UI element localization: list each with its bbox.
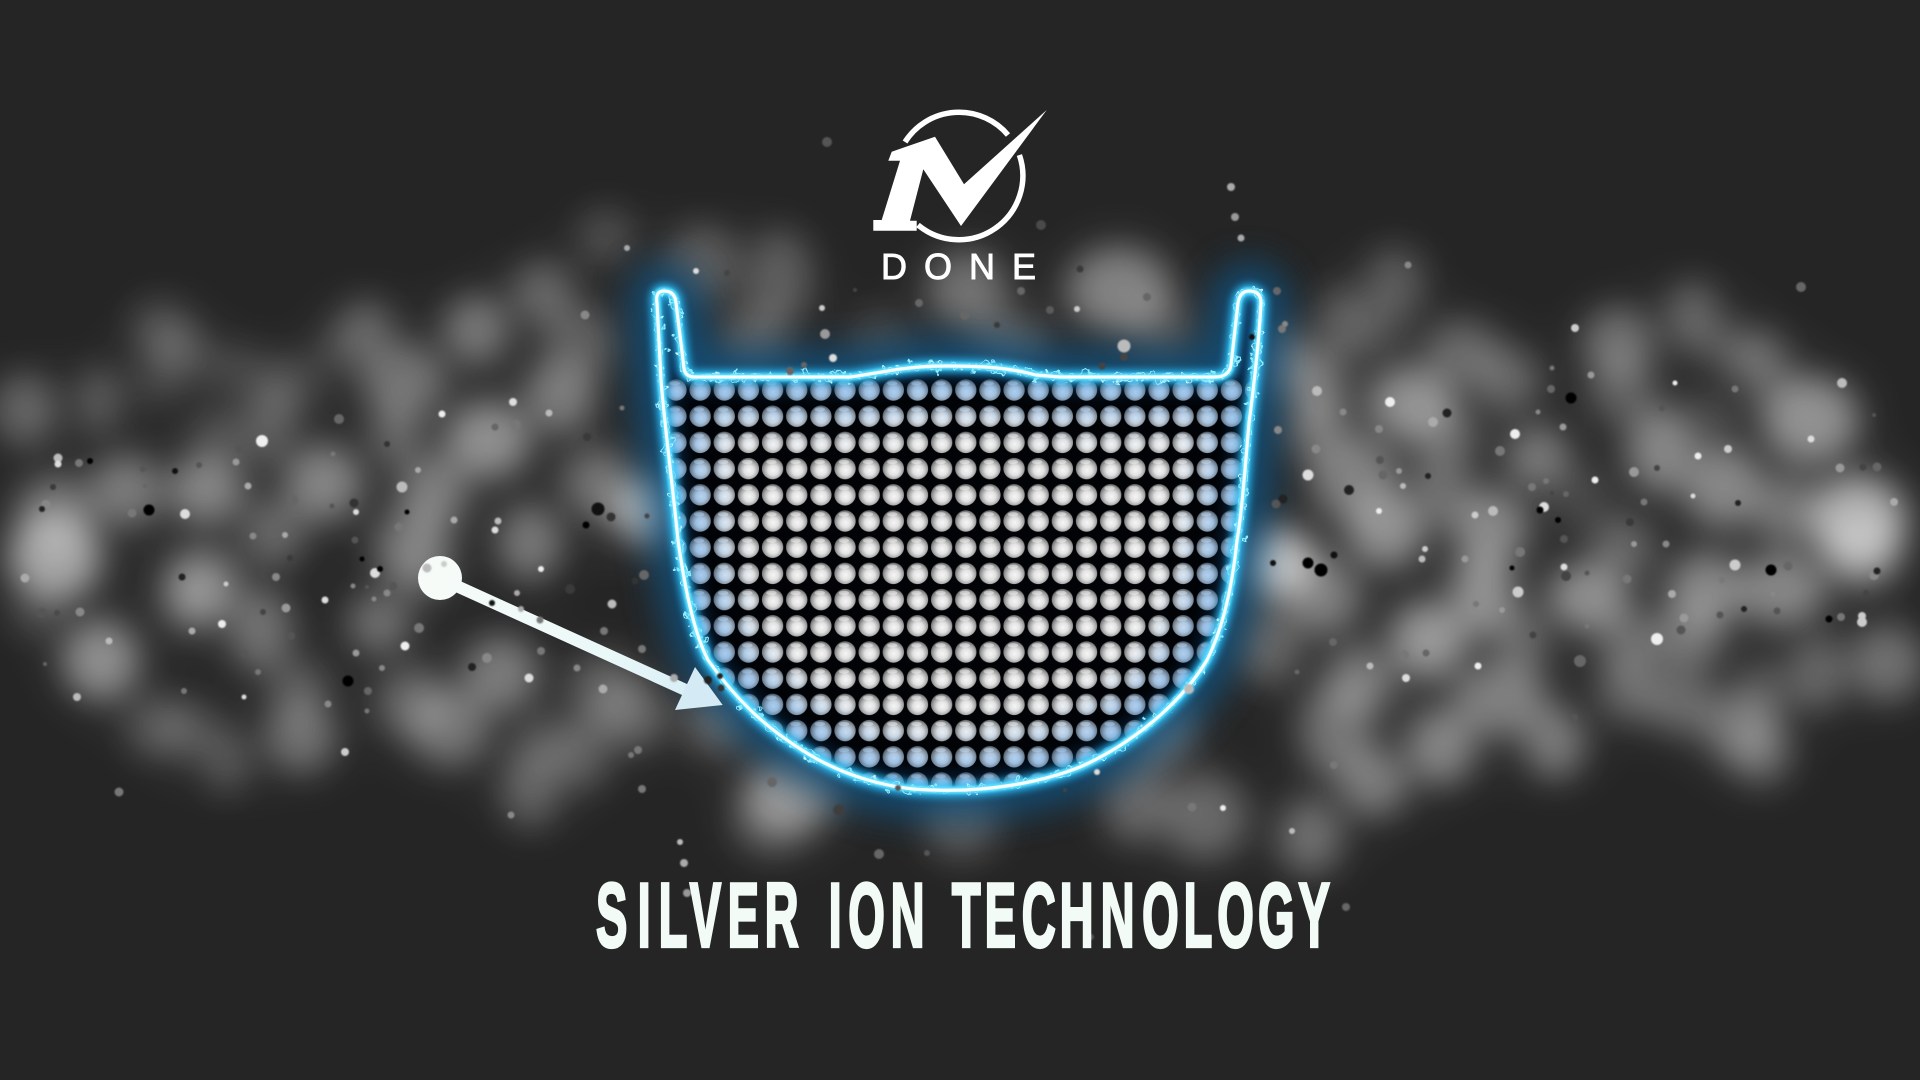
title: SILVER ION TECHNOLOGY: [596, 866, 1330, 967]
blue tint on edge spheres: [666, 370, 1250, 787]
logo ring: [905, 112, 1023, 240]
smoke cloud: [0, 217, 1917, 867]
inner edge glow: [657, 291, 1261, 790]
white core outline: [657, 291, 1261, 790]
floating particles: [20, 137, 1898, 940]
arrow head: [675, 667, 723, 710]
electric glow: [657, 291, 1261, 790]
silver ion sphere grid: [650, 378, 1270, 798]
cup interior: [657, 291, 1261, 790]
outer blue haze: [657, 291, 1261, 790]
cyan outline: [657, 291, 1261, 790]
arrow start ball: [418, 556, 462, 600]
logo wordmark: DONE: [881, 246, 1036, 287]
logo: N check mark with ring and DONE wordmark: [873, 110, 1047, 287]
lightning arcs: [657, 291, 1261, 790]
arrow shaft: [450, 583, 690, 692]
arrow: ion moving into the cup: [418, 556, 723, 710]
infographic canvas: [0, 110, 1920, 950]
logo mark: [873, 110, 1047, 231]
panel: glowing cup with silver ion spheres: [650, 291, 1270, 798]
